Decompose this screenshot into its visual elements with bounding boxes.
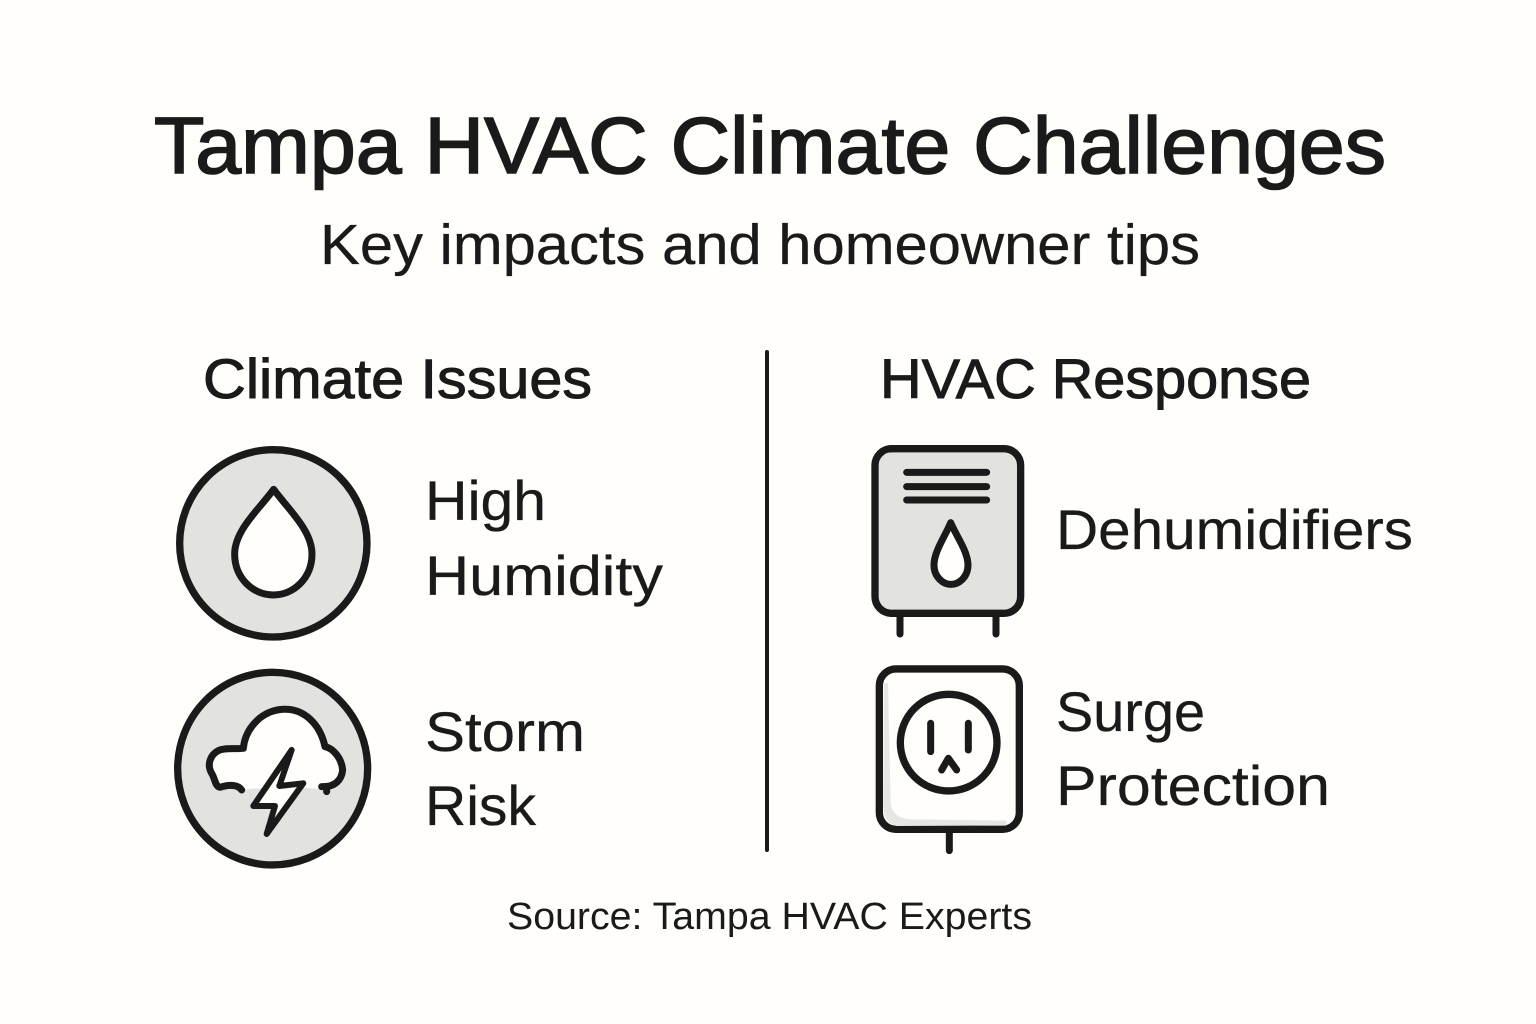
label: protection: Protection (1056, 754, 1330, 817)
icon: storm cloud with lightning (178, 672, 368, 865)
icon: surge protector outlet (879, 669, 1019, 851)
source note: Source: Tampa HVAC Experts (507, 896, 1032, 938)
label: humidity: Humidity (425, 544, 663, 607)
label: high humidity: High (425, 469, 546, 532)
label: surge: Surge (1056, 680, 1205, 743)
icon: dehumidifier (875, 449, 1021, 634)
icon: high humidity water drop (180, 450, 367, 637)
heading: climate issues: Climate Issues (203, 347, 592, 410)
label: risk: Risk (425, 774, 537, 837)
label: dehumidifiers: Dehumidifiers (1056, 498, 1413, 561)
heading: HVAC response: HVAC Response (880, 347, 1311, 410)
title: Tampa HVAC Climate Challenges (154, 101, 1386, 190)
label: storm: Storm (425, 700, 585, 763)
subtitle: Key impacts and homeowner tips (320, 213, 1200, 277)
center divider (765, 350, 769, 852)
